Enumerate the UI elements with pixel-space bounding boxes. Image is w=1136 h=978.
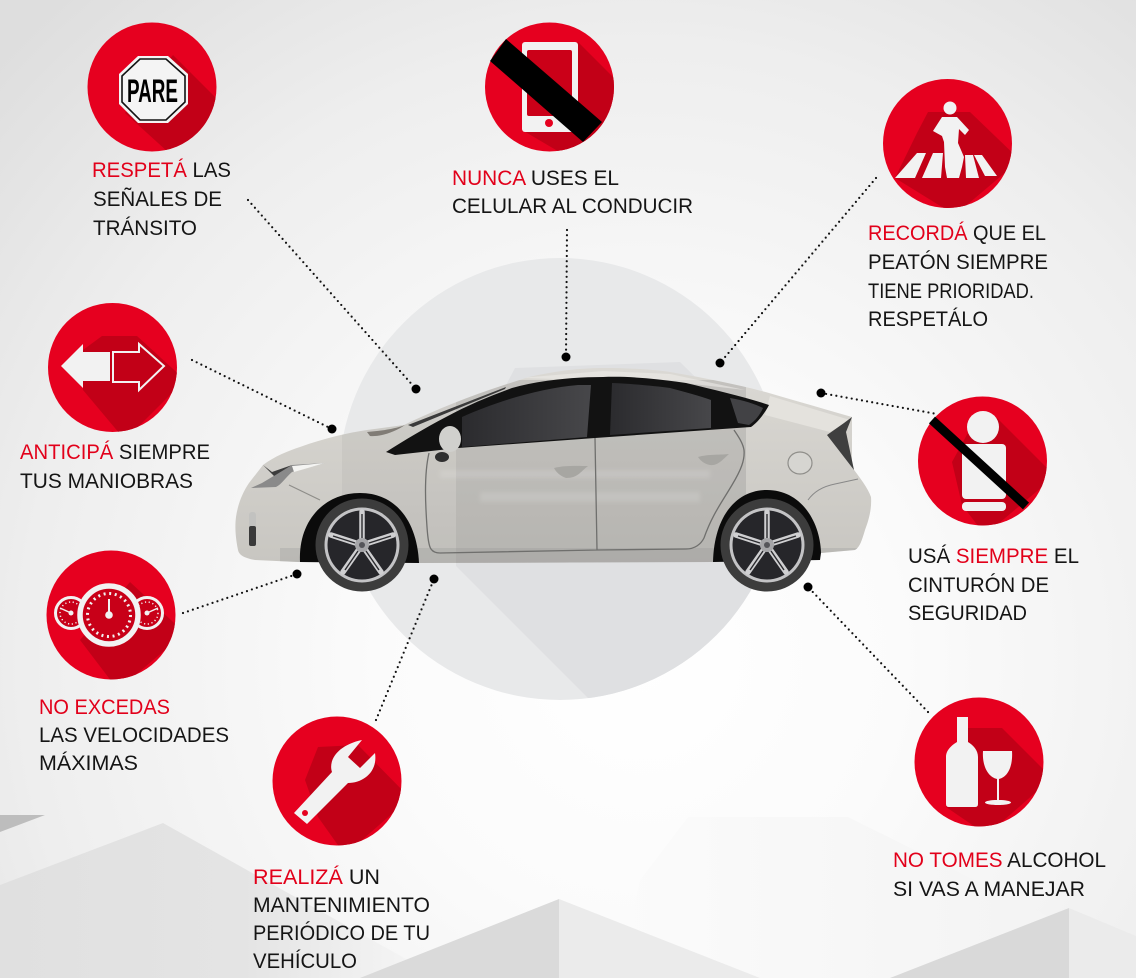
window surround [386,377,769,455]
icon: pedestrian crossing [883,79,1012,208]
text: no tomes: NO TOMES ALCOHOL [893,849,1106,872]
text: respetá: SEÑALES DE [93,187,222,211]
icon: direction arrows [48,303,177,432]
icon: no seatbelt [918,396,1047,526]
fuel cap [788,452,812,474]
car illustration [235,360,871,592]
text: anticipá: TUS MANIOBRAS [20,470,193,493]
front side glass [462,385,591,447]
text: usá siempre: CINTURÓN DE [908,574,1049,597]
text: anticipá: ANTICIPÁ SIEMPRE [20,441,210,464]
text: no excedas: NO EXCEDAS [39,696,170,719]
text: respetá: TRÁNSITO [93,217,197,240]
icon: stop sign [88,22,216,152]
text: respetá: RESPETÁ LAS [92,159,231,182]
headlight [251,463,325,488]
text: usá siempre: USÁ SIEMPRE EL [908,545,1079,568]
icon: no phone [485,22,614,152]
front wheel [316,498,408,592]
text: recordá [868,222,1048,331]
central grey circle with long shadow [339,258,790,705]
text: realizá: PERIÓDICO DE TU [253,922,430,945]
icon: wrench [272,716,402,846]
text: nunca: CELULAR AL CONDUCIR [452,195,693,218]
rear wheel [720,498,814,592]
text: recordá: RESPETÁLO [868,308,988,331]
tail light [827,417,854,470]
rear side glass [610,383,711,435]
windshield wiper strip [408,387,506,427]
icon: stop sign: PARE [127,73,178,109]
front fog lamp [249,512,256,532]
text: nunca: NUNCA USES EL [452,167,619,190]
door lines [425,430,744,553]
text: no tomes [893,849,1106,901]
text: no tomes: SI VAS A MANEJAR [893,878,1085,901]
text: recordá: PEATÓN SIEMPRE [868,251,1048,274]
text: usá siempre [908,545,1079,625]
text: anticipá [20,441,210,493]
text: usá siempre: SEGURIDAD [908,602,1027,625]
text: nunca [452,167,693,218]
icon: speedometers [46,550,176,680]
text: no excedas: LAS VELOCIDADES [39,724,229,747]
leader dots [292,352,826,592]
text: no excedas: MÁXIMAS [39,752,138,775]
text: recordá: RECORDÁ QUE EL [868,222,1046,245]
text: no excedas [39,696,229,775]
icon: bottle and glass [914,698,1044,826]
door handles [554,466,588,478]
rear quarter glass [730,398,763,425]
text: realizá: VEHÍCULO [253,950,357,973]
text: respetá [92,159,231,240]
car body [235,368,871,563]
background mountains [0,815,1136,978]
text: realizá: MANTENIMIENTO [253,894,430,917]
leader lines [183,178,937,720]
text: realizá [253,866,430,973]
text: recordá: TIENE PRIORIDAD. [868,280,1034,303]
mirror [439,426,461,452]
wheel arches [300,493,419,563]
text: realizá: REALIZÁ UN [253,866,380,889]
